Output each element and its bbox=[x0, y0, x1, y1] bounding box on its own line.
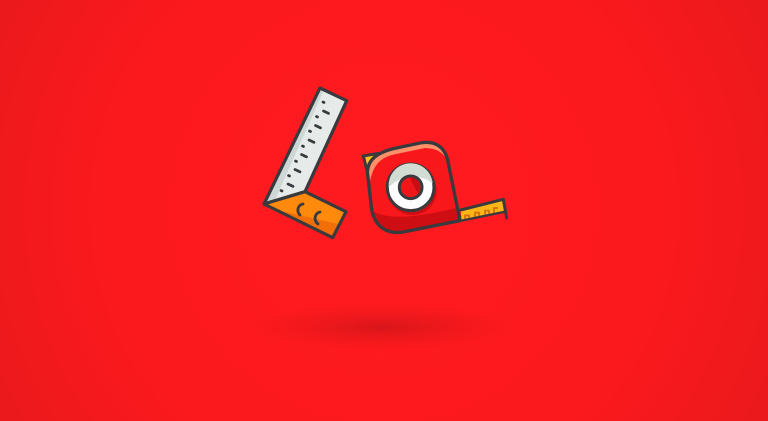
ruler blade bbox=[264, 88, 347, 204]
handle rivets bbox=[298, 204, 320, 224]
icon: steel square ruler bbox=[264, 88, 347, 238]
orange handle bbox=[264, 192, 346, 238]
tape case bbox=[367, 142, 460, 233]
tape blade bbox=[461, 199, 507, 221]
ground shadow bbox=[250, 304, 514, 350]
icon: tape measure bbox=[363, 142, 507, 233]
ruler tick marks bbox=[281, 102, 328, 191]
tape dial bbox=[387, 163, 437, 215]
tape corner tab bbox=[363, 153, 378, 169]
